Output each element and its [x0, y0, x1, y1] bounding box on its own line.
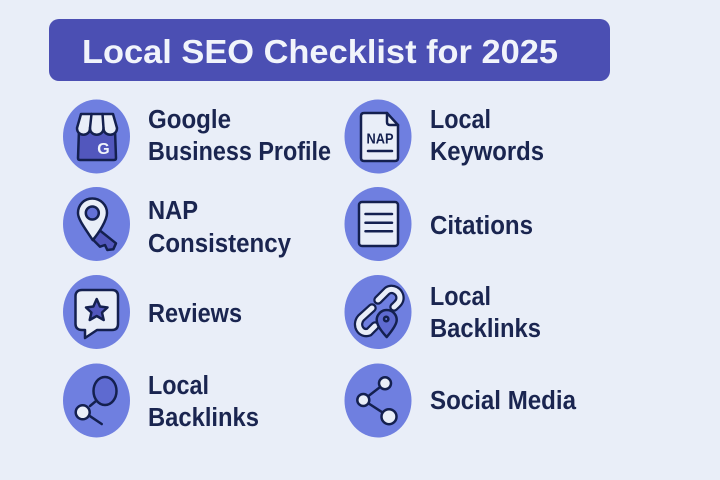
icon: linked nodes	[63, 364, 130, 438]
label	[148, 197, 292, 258]
label	[430, 283, 541, 343]
item: Local Backlinks (right)	[344, 275, 541, 349]
title banner	[49, 19, 610, 81]
label: Local	[430, 283, 491, 311]
label	[148, 372, 259, 432]
icon: list document	[344, 187, 412, 261]
label: NAP	[148, 197, 198, 225]
label: Local	[148, 372, 209, 400]
item: Local Keywords	[344, 100, 544, 174]
item: Google Business Profile	[63, 100, 331, 174]
label	[148, 106, 331, 166]
icon: share nodes	[344, 364, 412, 438]
icon: star speech bubble	[63, 275, 130, 349]
item: Social Media	[344, 364, 577, 438]
label: Backlinks	[430, 315, 541, 343]
label: Citations	[430, 212, 533, 240]
item: Citations	[344, 187, 533, 261]
label: Social Media	[430, 387, 577, 415]
label: Google	[148, 106, 231, 134]
item: Local Backlinks (left)	[63, 364, 259, 438]
icon: NAP document	[344, 100, 412, 174]
item: Reviews	[63, 275, 242, 349]
icon: storefront: G	[97, 141, 110, 158]
icon: storefront	[63, 100, 130, 174]
title banner: Local SEO Checklist for 2025	[82, 33, 558, 70]
icon: map pin key	[63, 187, 130, 261]
label: Local	[430, 106, 491, 134]
label	[430, 106, 544, 166]
item: NAP Consistency	[63, 187, 292, 261]
label: Consistency	[148, 230, 292, 258]
label: Backlinks	[148, 404, 259, 432]
icon: chain link with pin	[344, 275, 412, 349]
label: Keywords	[430, 138, 544, 166]
icon: NAP document: NAP	[366, 132, 394, 148]
label: Reviews	[148, 300, 242, 328]
label: Business Profile	[148, 138, 331, 166]
